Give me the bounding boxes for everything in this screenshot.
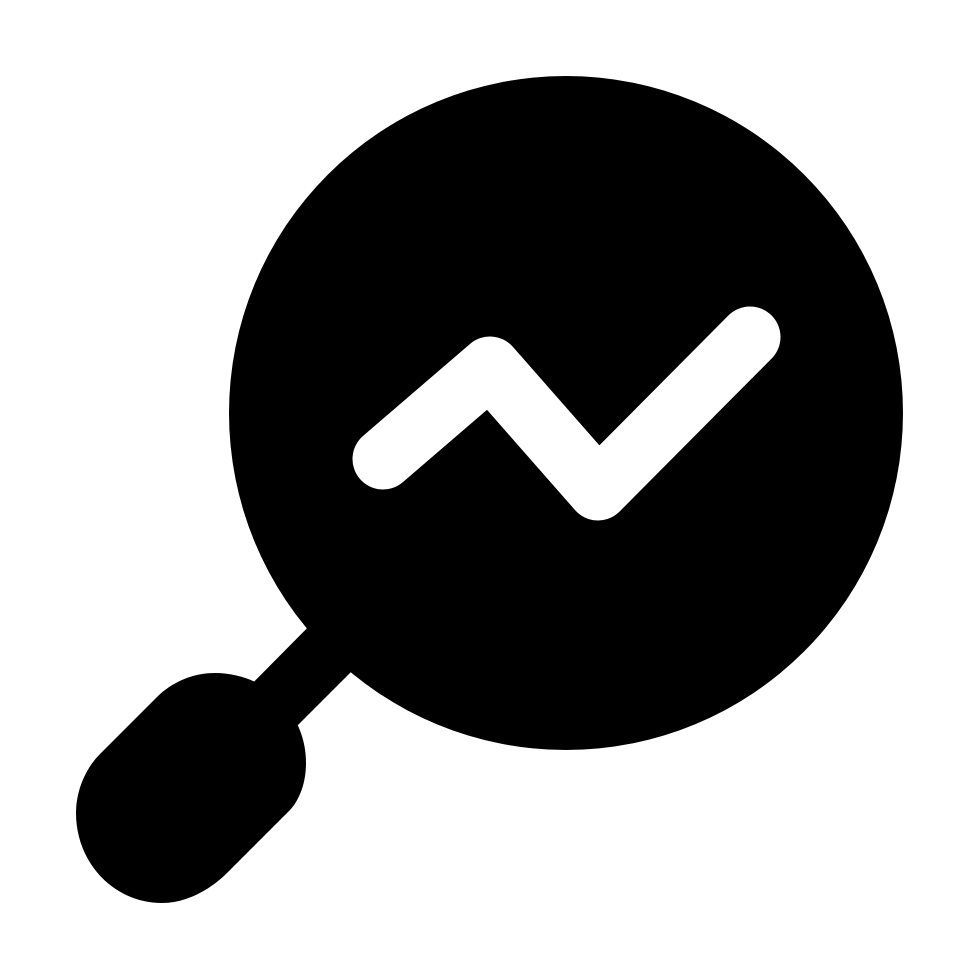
icon: magnifier lens xyxy=(229,76,903,750)
icon: magnifier handle stem xyxy=(235,604,375,744)
icon: trend line xyxy=(383,337,750,490)
icon: magnifier grip xyxy=(76,673,306,903)
